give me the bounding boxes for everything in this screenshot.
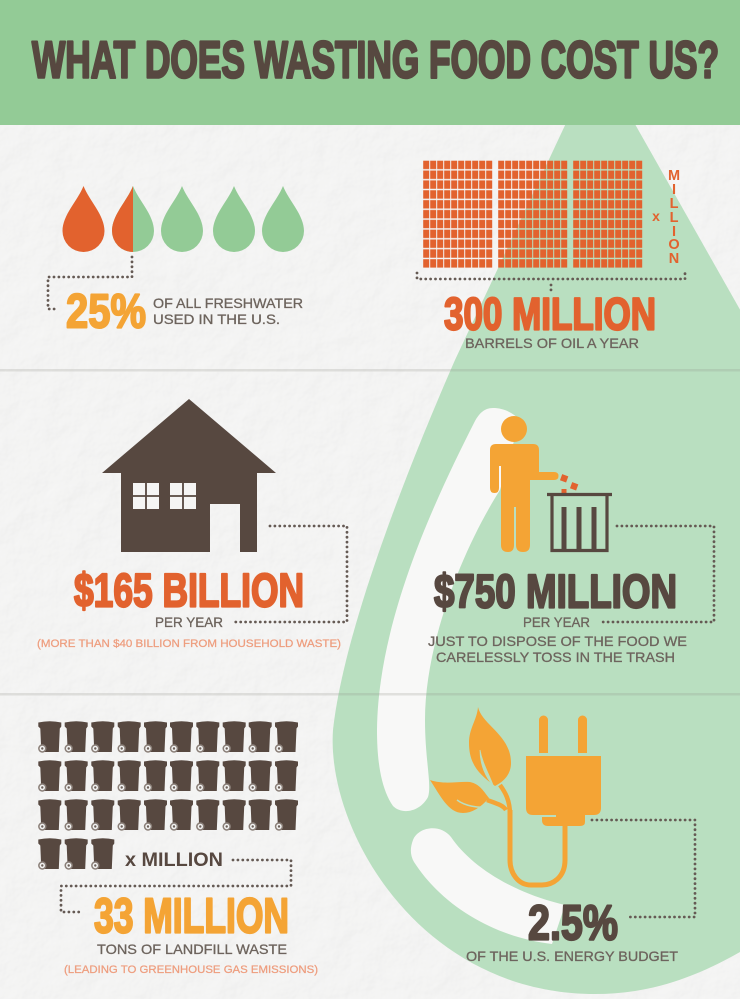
text: per year: PER YEAR [155, 614, 223, 630]
drop highlight: lower white curve [411, 828, 565, 944]
label: times million, vertical: MILLION [668, 168, 680, 267]
panel: household cost [37, 399, 347, 650]
icon: plug with leaves [430, 707, 601, 885]
text: freshwater caption: OF ALL FRESHWATER [153, 295, 303, 311]
header band [0, 0, 740, 125]
text: energy caption: OF THE U.S. ENERGY BUDGET [466, 948, 678, 964]
panel: landfill [38, 721, 318, 976]
icon: person tossing food into bin [490, 416, 612, 552]
text: household waste note: (MORE THAN $40 BILLION FROM HOUSEHOLD WASTE) [37, 638, 341, 650]
label: times million: x MILLION [125, 850, 223, 871]
stat: 2.5%: 2.5% [528, 896, 618, 950]
panel: oil [417, 160, 685, 351]
panel: energy [430, 707, 695, 964]
stat: 300 million: 300 MILLION [444, 288, 656, 340]
text: disposal caption: CARELESSLY TOSS IN THE TRASH [436, 649, 675, 665]
text: freshwater caption [153, 295, 303, 327]
label: times million, vertical [652, 168, 680, 267]
text: per year: PER YEAR [523, 614, 590, 630]
panel: freshwater [48, 186, 304, 338]
stat: $165 billion: $165 BILLION [74, 564, 304, 616]
stat: $750 million: $750 MILLION [434, 564, 677, 618]
icon: five water drops, one and a half orange [62, 186, 304, 252]
chart: 33 waste bins [38, 721, 298, 870]
text: freshwater caption: USED IN THE U.S. [153, 311, 280, 327]
panel: disposal cost [428, 416, 714, 665]
text: greenhouse gas note: (LEADING TO GREENHOUSE GAS EMISSIONS) [64, 964, 318, 976]
stat: 25%: 25% [66, 286, 146, 338]
text: disposal caption: JUST TO DISPOSE OF THE FOOD WE [428, 633, 687, 649]
label: times million, vertical: x [652, 208, 660, 224]
large background water drop [333, 57, 740, 994]
stat: 33 million: 33 MILLION [94, 890, 289, 944]
chart: barrel grid [423, 160, 643, 268]
text: disposal caption [428, 633, 687, 665]
text: barrels caption: BARRELS OF OIL A YEAR [465, 335, 639, 351]
drop highlight: upper white curve [377, 408, 520, 811]
icon: house [102, 399, 276, 552]
text: landfill caption: TONS OF LANDFILL WASTE [97, 941, 287, 957]
